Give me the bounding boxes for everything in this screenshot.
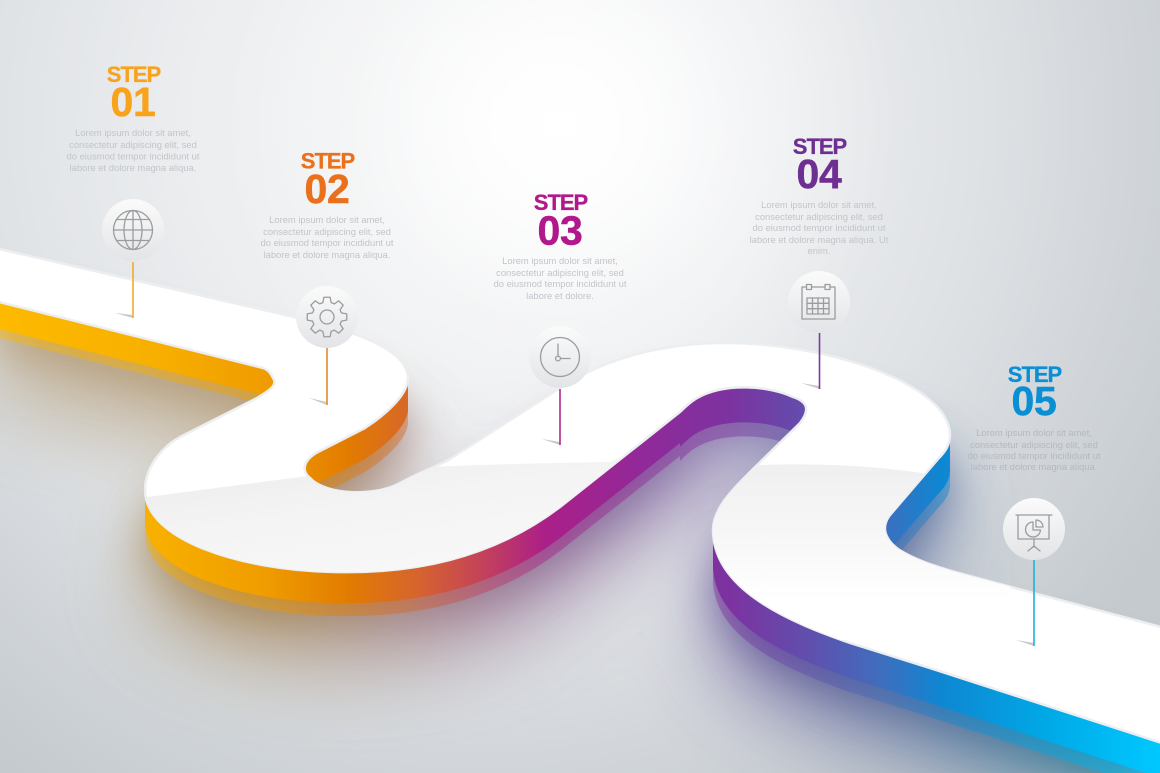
text block: step 04 (750, 199, 889, 256)
text block: step 04: enim. (808, 245, 830, 256)
text block: step 03: labore et dolore. (526, 290, 594, 301)
heading: step 03: 03 (537, 208, 583, 254)
text block: step 03: consectetur adipiscing elit, sed (496, 267, 624, 278)
heading: step 04: STEP (793, 134, 847, 159)
pin 03 with shadow (542, 389, 561, 445)
heading: step 01: STEP (107, 62, 161, 87)
heading: step 01: 01 (110, 79, 156, 125)
text block: step 01 (67, 127, 200, 173)
text block: step 02 (261, 214, 394, 260)
text block: step 05: Lorem ipsum dolor sit amet, (976, 427, 1092, 438)
heading: step 02: 02 (304, 166, 350, 212)
text block: step 04: Lorem ipsum dolor sit amet, (761, 199, 877, 210)
text block: step 05: labore et dolore magna aliqua. (971, 461, 1097, 472)
step 05 text (968, 362, 1101, 472)
text block: step 02: do eiusmod tempor incididunt ut (261, 237, 394, 248)
road surface shading (147, 458, 1010, 640)
step 04 text (750, 134, 889, 256)
wide ground shadow (0, 338, 1160, 773)
step 03 text (494, 190, 627, 301)
heading: step 04 (793, 134, 847, 197)
text block: step 02: Lorem ipsum dolor sit amet, (269, 214, 385, 225)
road ground shadow (0, 298, 1160, 773)
text block: step 04: consectetur adipiscing elit, sed (755, 211, 883, 222)
icon: presentation board (1003, 498, 1065, 560)
text block: step 02: labore et dolore magna aliqua. (264, 249, 390, 260)
heading: step 04: 04 (796, 151, 842, 197)
text block: step 03: do eiusmod tempor incididunt ut (494, 278, 627, 289)
heading: step 02 (301, 148, 355, 212)
pin 04 with shadow (801, 332, 820, 389)
road top surface (0, 248, 1160, 744)
text block: step 04: do eiusmod tempor incididunt ut (753, 222, 886, 233)
icon: globe (102, 199, 164, 261)
text block: step 02: consectetur adipiscing elit, sed (263, 226, 391, 237)
text block: step 01: Lorem ipsum dolor sit amet, (75, 127, 191, 138)
text block: step 03 (494, 255, 627, 301)
heading: step 02: STEP (301, 148, 355, 174)
heading: step 03 (534, 190, 588, 254)
icon: clock (529, 326, 591, 388)
text block: step 05: consectetur adipiscing elit, sed (970, 439, 1098, 450)
text block: step 03: Lorem ipsum dolor sit amet, (502, 255, 618, 266)
heading: step 03: STEP (534, 190, 588, 215)
heading: step 05: 05 (1011, 378, 1057, 424)
text block: step 01: consectetur adipiscing elit, sed (69, 139, 197, 150)
text block: step 05 (968, 427, 1101, 472)
heading: step 05 (1008, 362, 1062, 424)
icon: calendar (788, 271, 850, 333)
pin 02 with shadow (309, 348, 328, 405)
text block: step 01: labore et dolore magna aliqua. (70, 162, 196, 173)
step 02 text (261, 148, 394, 260)
heading: step 01 (107, 62, 161, 125)
step 01 text (67, 62, 200, 173)
text block: step 05: do eiusmod tempor incididunt ut (968, 450, 1101, 461)
road: winding path with gradient sides (0, 248, 1160, 773)
pin 05 with shadow (1016, 560, 1035, 646)
pin 01 with shadow (115, 262, 134, 318)
icon: gear (296, 286, 358, 348)
road side: translucent lower band (0, 329, 1146, 773)
road side: solid gradient band (0, 304, 1160, 773)
text block: step 04: labore et dolore magna aliqua. Ut (750, 234, 889, 245)
heading: step 05: STEP (1008, 362, 1062, 387)
text block: step 01: do eiusmod tempor incididunt ut (67, 150, 200, 162)
